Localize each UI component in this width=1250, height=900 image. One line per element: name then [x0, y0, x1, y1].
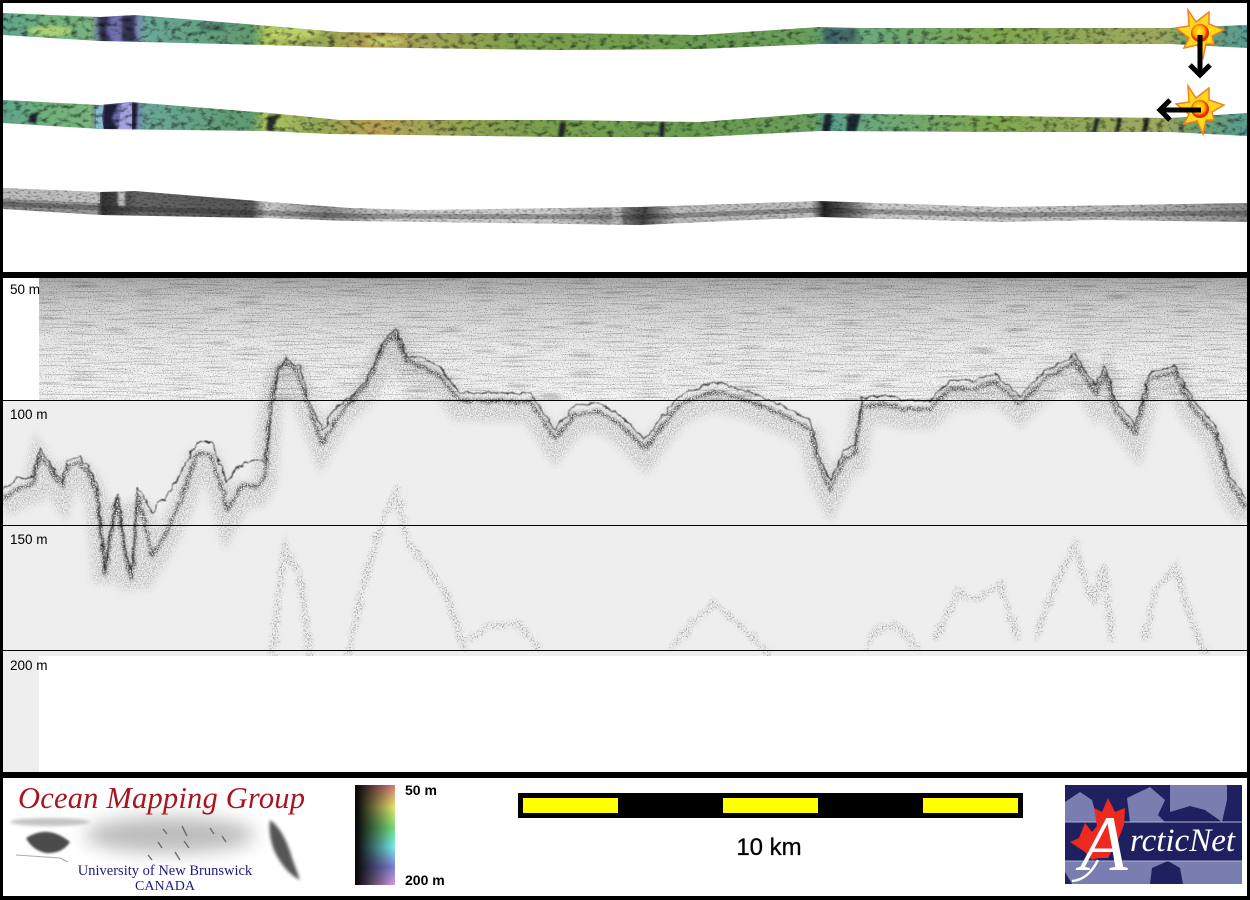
logo wordmark	[1072, 800, 1236, 887]
depth labels: 200 m	[10, 658, 48, 673]
logo wordmark: A	[1075, 800, 1128, 887]
seabed primary echo	[3, 330, 1247, 579]
seabed multiple echo	[272, 492, 1205, 660]
icon: red maple leaf	[1070, 798, 1125, 860]
panel: footer	[3, 778, 1247, 896]
colour legend: depth vs shading	[355, 782, 445, 888]
arrow: light direction west	[1160, 100, 1201, 120]
logo: ArcticNet	[1065, 785, 1242, 887]
depth labels: 50 m	[10, 282, 40, 297]
icon: sun marker, lower strip	[1176, 86, 1224, 134]
water column noise	[39, 278, 1247, 400]
depth gridlines	[3, 400, 1247, 650]
swath strip: colour relief, lighting from east	[3, 100, 1247, 137]
icon: sun marker, upper strip	[1176, 10, 1224, 58]
colour legend: depth vs shading: 200 m	[405, 872, 445, 888]
swath strip: colour relief, lighting from north	[3, 13, 1247, 50]
scale bar: 10 km	[736, 834, 802, 861]
depth labels: 150 m	[10, 532, 48, 547]
scale bar	[518, 793, 1023, 861]
swath strip: greyscale backscatter	[3, 188, 1247, 225]
logo: Ocean Mapping Group	[10, 781, 305, 894]
logo subtitle: University of New Brunswick	[78, 863, 253, 879]
colour legend: depth vs shading: 50 m	[405, 782, 437, 798]
logo country: CANADA	[135, 879, 196, 894]
depth labels: 100 m	[10, 407, 48, 422]
map landmasses	[1065, 785, 1242, 884]
logo wordmark: rcticNet	[1130, 823, 1236, 859]
sub-seabed scatter plume	[3, 343, 1247, 587]
panel: seabed swath maps	[0, 3, 1250, 272]
arrow: light direction south	[1190, 35, 1210, 75]
panel: sub-bottom profile	[3, 278, 1247, 772]
depth labels	[10, 282, 48, 673]
logo title: Ocean Mapping Group	[18, 781, 305, 815]
